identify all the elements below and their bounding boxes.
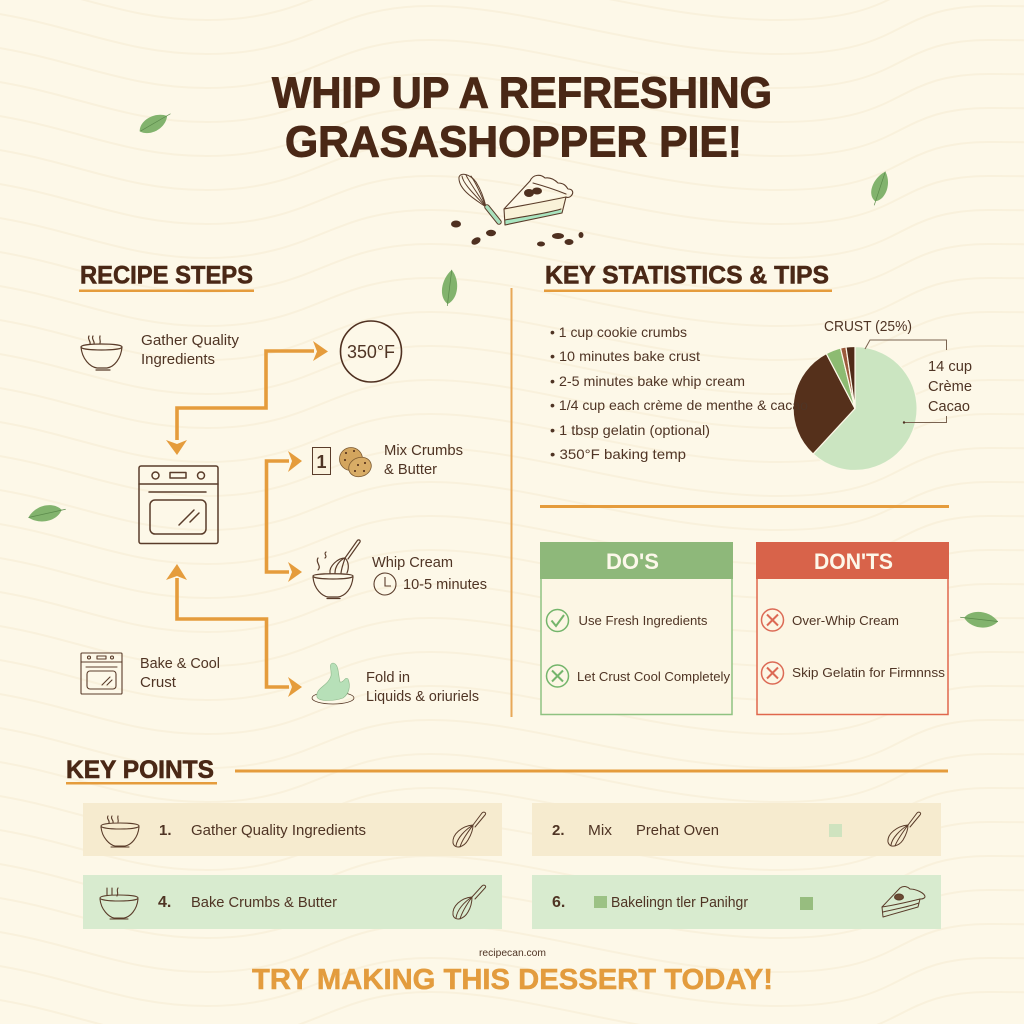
panel: key point 2: 2. bbox=[552, 822, 565, 839]
text block: key statistics list: • 1 tbsp gelatin (optional) bbox=[550, 422, 710, 438]
arrow: branching to mix crumbs and whip cream bbox=[266, 451, 302, 582]
arrow: bake to oven and fold in bbox=[166, 564, 302, 697]
text block: key statistics list: • 1/4 cup each crème de menthe & cacao bbox=[550, 397, 808, 413]
icon: bowl bbox=[101, 816, 139, 847]
pie labels and leader lines: 14 cup bbox=[928, 359, 972, 375]
icon: cross in green circle bbox=[546, 665, 568, 687]
text: fold in liquids: Liquids & oriuriels bbox=[366, 689, 479, 705]
pie labels and leader lines: Cacao bbox=[928, 399, 970, 415]
icon: red cross bbox=[762, 662, 784, 684]
icon: whisk bbox=[453, 885, 486, 919]
icon: red cross bbox=[762, 609, 784, 631]
panel: do's bbox=[540, 542, 733, 714]
text: over-whip cream: Over-Whip Cream bbox=[792, 613, 899, 628]
text block: key statistics list: • 10 minutes bake crust bbox=[550, 348, 700, 364]
text: gather quality ingredients bbox=[141, 333, 240, 368]
pie labels and leader lines bbox=[824, 319, 972, 424]
panel: don'ts bbox=[756, 542, 949, 714]
icon: small oven bbox=[81, 653, 122, 694]
divider: vertical bbox=[510, 288, 512, 717]
panel: key point 1 bbox=[83, 803, 502, 856]
icon: check bbox=[546, 610, 568, 632]
text: use fresh ingredients: Use Fresh Ingredients bbox=[578, 613, 708, 628]
panel: key point 1: Gather Quality Ingredients bbox=[191, 823, 366, 839]
text block: key statistics list bbox=[550, 324, 808, 462]
panel: recipe steps flow bbox=[81, 321, 487, 705]
icon: mint leaf bbox=[959, 609, 999, 630]
title: WHIP UP A REFRESHING bbox=[272, 68, 772, 118]
icon: whisk bbox=[888, 812, 921, 846]
call to action: TRY MAKING THIS DESSERT TODAY! bbox=[252, 964, 773, 996]
heading: key points: KEY POINTS bbox=[66, 756, 214, 784]
text: bake and cool crust: Crust bbox=[140, 675, 176, 691]
text: skip gelatin: Skip Gelatin for Firmnnss bbox=[792, 665, 946, 680]
title: GRASASHOPPER PIE! bbox=[285, 118, 742, 166]
icon: bowl bbox=[100, 888, 138, 919]
icon: number card and cookies bbox=[312, 448, 374, 480]
icon: oven bbox=[139, 466, 218, 544]
text: bake and cool crust bbox=[140, 656, 220, 691]
icon: pie slice bbox=[882, 886, 925, 917]
text block: key statistics list: • 2-5 minutes bake whip cream bbox=[550, 373, 745, 389]
icon: mint leaf bbox=[438, 269, 462, 307]
text: fold in liquids bbox=[366, 670, 479, 705]
text: whip cream with time bbox=[372, 555, 487, 595]
text: mix crumbs and butter bbox=[384, 443, 463, 478]
icon: whipping bowl bbox=[313, 540, 360, 598]
text: mix crumbs and butter: Mix Crumbs bbox=[384, 443, 463, 459]
icon: whisk and pie slice illustration bbox=[451, 174, 584, 246]
panel: key point 6 bbox=[532, 875, 941, 929]
panel: don'ts: DON'TS bbox=[814, 549, 893, 574]
text: whip cream with time: 10-5 minutes bbox=[403, 577, 487, 593]
panel: key point 6: 6. bbox=[552, 894, 565, 911]
panel: do's: DO'S bbox=[606, 549, 659, 574]
icon: mint leaf bbox=[865, 169, 894, 207]
panel: key point 4: 4. bbox=[158, 894, 171, 911]
text: whip cream with time: Whip Cream bbox=[372, 555, 453, 571]
text: mix crumbs and butter: & Butter bbox=[384, 462, 437, 478]
text block: key statistics list: • 350°F baking temp bbox=[550, 446, 686, 462]
panel: key point 2: Mix bbox=[588, 823, 613, 839]
text: gather quality ingredients: Ingredients bbox=[141, 352, 215, 368]
icon: green liquid swirl bbox=[312, 663, 354, 704]
heading: key statistics and tips: KEY STATISTICS & TIPS bbox=[545, 262, 829, 290]
arrow: ingredients to oven via 350F bbox=[166, 341, 328, 455]
icon: whisk bbox=[453, 812, 486, 847]
panel: key point 6: Bakelingn tler Panihgr bbox=[611, 895, 748, 911]
panel: key point 1: 1. bbox=[159, 822, 172, 839]
pie labels and leader lines: Crème bbox=[928, 379, 972, 395]
icon: 350F temperature circle: 350°F bbox=[347, 341, 395, 362]
text: fold in liquids: Fold in bbox=[366, 670, 410, 686]
title bbox=[272, 68, 772, 166]
icon: 350F temperature circle bbox=[340, 321, 402, 382]
text: let crust cool completely: Let Crust Cool Completely bbox=[577, 669, 730, 684]
text block: key statistics list: • 1 cup cookie crumbs bbox=[550, 324, 687, 340]
icon: mint leaf bbox=[27, 503, 67, 524]
divider: horizontal bbox=[540, 505, 949, 508]
text: bake and cool crust: Bake & Cool bbox=[140, 656, 220, 672]
icon: bowl bbox=[81, 336, 122, 370]
heading: key points bbox=[66, 756, 948, 784]
text: source credit: recipecan.com bbox=[479, 948, 546, 959]
icon: number card and cookies: 1 bbox=[316, 452, 327, 472]
heading: recipe steps: RECIPE STEPS bbox=[80, 262, 253, 290]
panel: key point 2: Prehat Oven bbox=[636, 823, 719, 839]
icon: mint leaf bbox=[136, 110, 174, 136]
panel: key point 4 bbox=[83, 875, 502, 929]
pie chart bbox=[793, 346, 917, 470]
panel: key point 2 bbox=[532, 803, 941, 856]
text: gather quality ingredients: Gather Quality bbox=[141, 333, 240, 349]
pie labels and leader lines: CRUST (25%) bbox=[824, 319, 912, 335]
panel: key point 4: Bake Crumbs & Butter bbox=[191, 895, 337, 911]
